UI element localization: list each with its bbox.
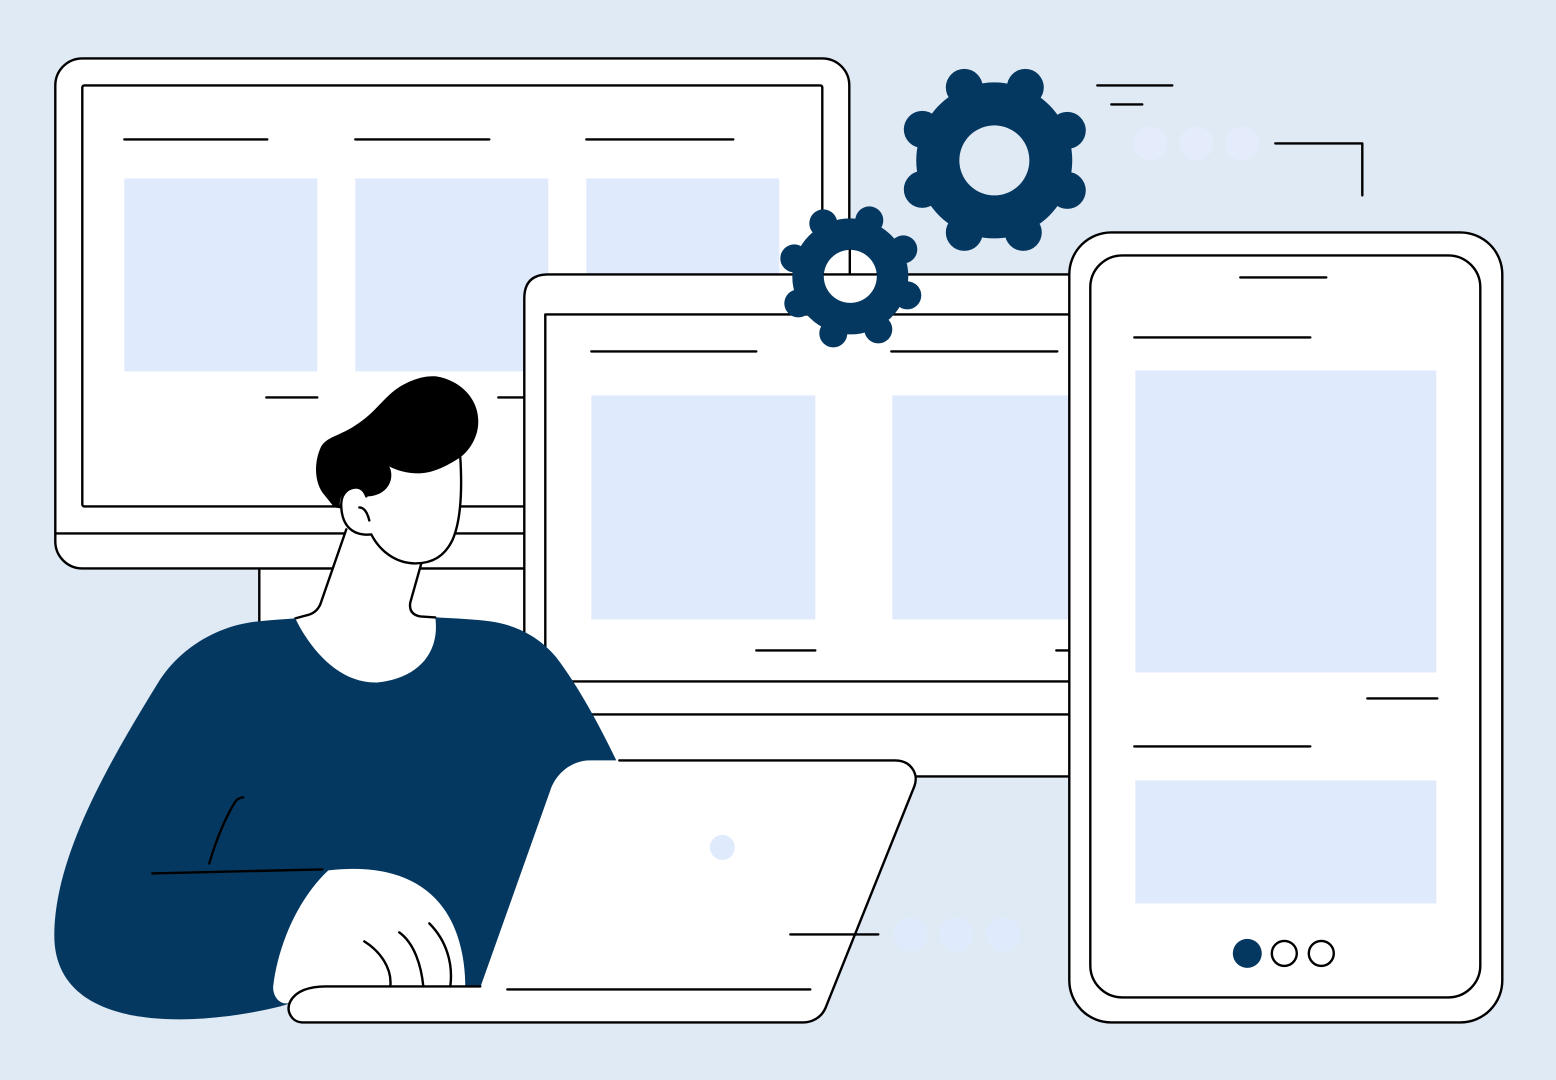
column headings	[591, 350, 1057, 353]
monitor stand	[259, 568, 540, 640]
speaker line	[1240, 276, 1326, 279]
person	[54, 376, 640, 1019]
large content block	[1135, 370, 1436, 672]
icon: large gear	[904, 69, 1086, 251]
hand	[273, 869, 465, 1003]
column headings	[124, 138, 733, 141]
icon: small gear	[780, 206, 921, 347]
panel: phone	[1069, 232, 1502, 1022]
loading dots top	[1133, 126, 1259, 160]
content blocks	[124, 178, 779, 371]
monitor screen	[82, 85, 822, 506]
caption line	[1367, 697, 1437, 700]
laptop base line	[507, 988, 810, 991]
hair	[316, 376, 478, 508]
caption lines	[266, 396, 530, 399]
monitor screen	[545, 314, 1075, 714]
pagination dots	[1233, 939, 1334, 968]
face outline	[341, 457, 461, 563]
ear fill	[341, 487, 375, 535]
neck outline	[295, 529, 435, 618]
content blocks	[591, 395, 1072, 619]
laptop logo	[710, 835, 735, 860]
laptop shell	[289, 760, 916, 1022]
pointer line	[790, 933, 878, 936]
laptop outline	[289, 760, 916, 1022]
torso	[54, 617, 640, 1019]
monitor frame	[524, 274, 1075, 800]
caption lines	[756, 649, 1072, 652]
panel: large desktop monitor	[55, 58, 849, 640]
second heading line	[1134, 745, 1310, 748]
loading dots bottom	[893, 917, 1020, 951]
heading line	[1134, 336, 1310, 339]
phone screen	[1090, 255, 1480, 997]
ear detail	[359, 507, 369, 520]
panel: mid-size monitor	[524, 274, 1075, 800]
decorative top lines	[1097, 85, 1172, 104]
neck and head skin	[295, 457, 460, 700]
finger lines	[364, 923, 451, 986]
bracket line	[1275, 143, 1362, 195]
small content block	[1135, 780, 1436, 903]
laptop	[289, 760, 916, 1022]
sleeve crease lines	[152, 797, 322, 873]
monitor frame	[55, 58, 849, 568]
phone frame	[1069, 232, 1502, 1022]
